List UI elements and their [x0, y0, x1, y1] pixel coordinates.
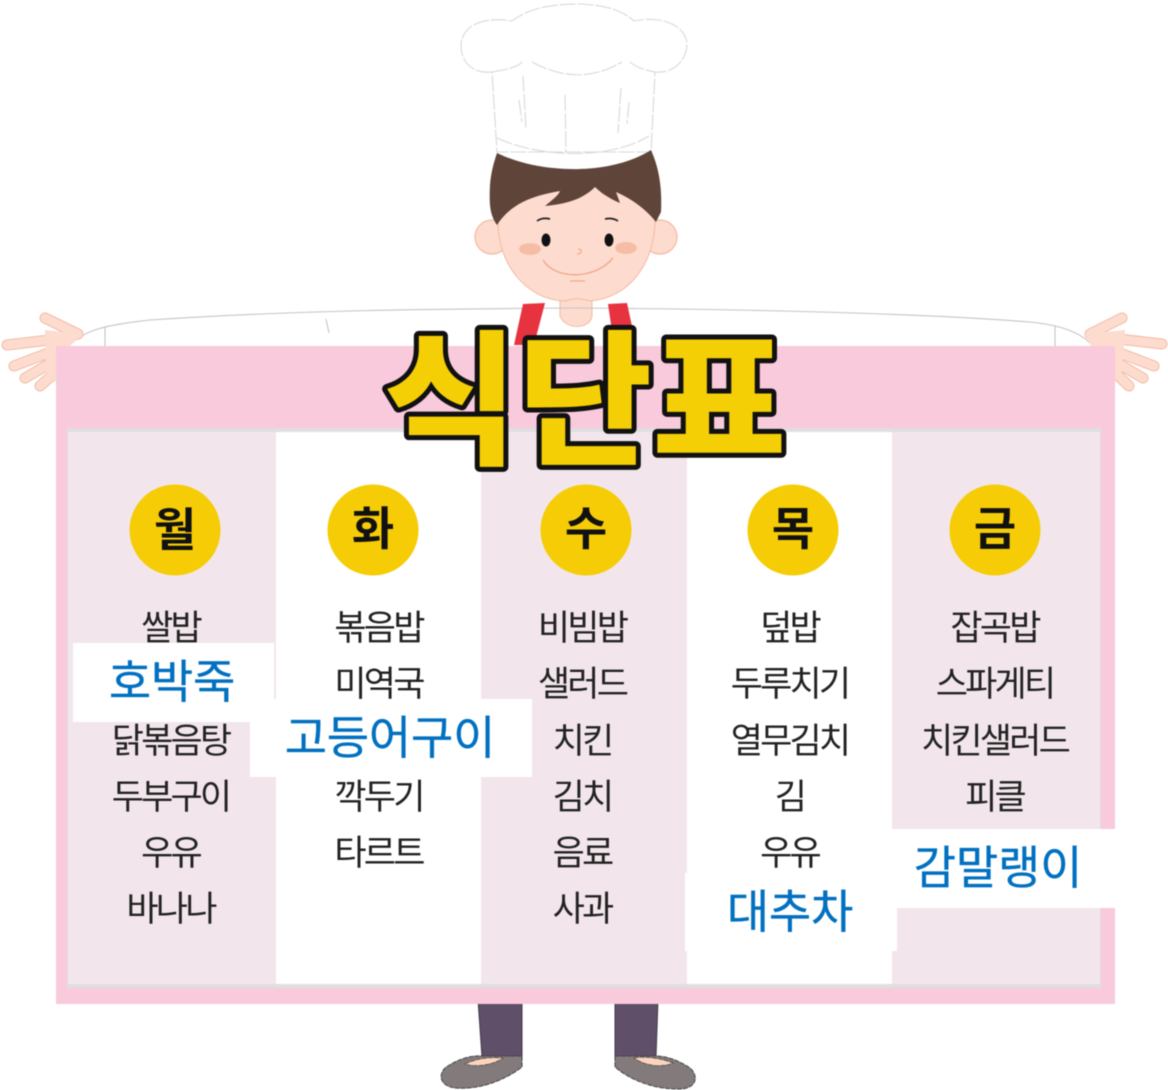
menu list: Thursday: 김	[775, 778, 804, 817]
menu list: Wednesday: 사과	[553, 890, 614, 929]
badge: Wednesday	[540, 484, 632, 576]
badge: Friday: 금	[974, 503, 1016, 555]
icon: shoes	[441, 1056, 695, 1089]
menu list: Tuesday: 깍두기	[334, 778, 423, 817]
callout: dried persimmon	[892, 829, 1115, 908]
menu list: Tuesday: 볶음밥	[334, 609, 424, 648]
badge: Monday	[130, 484, 220, 576]
badge: Thursday: 목	[772, 503, 814, 555]
menu list: Friday: 잡곡밥	[950, 609, 1040, 648]
menu list: Monday: 쌀밥	[141, 609, 201, 648]
menu list: Wednesday: 김치	[553, 778, 611, 817]
menu list: Monday: 두부구이	[112, 778, 229, 817]
icon: ears	[475, 220, 677, 254]
icon: face	[498, 185, 655, 301]
menu list: Friday	[921, 609, 1070, 817]
icon: apron straps	[514, 303, 636, 345]
icon: facial features	[519, 218, 637, 281]
badge: Tuesday	[328, 484, 418, 576]
icon: sleeves	[70, 308, 1092, 346]
icon: left hand	[7, 318, 82, 386]
menu list: Wednesday: 음료	[553, 834, 613, 873]
icon: chef hat	[461, 4, 687, 154]
column: Friday background	[892, 432, 1100, 984]
menu list: Tuesday	[334, 609, 424, 873]
column: Monday background	[68, 432, 276, 984]
icon: right hand	[1085, 318, 1162, 386]
column: Tuesday background	[276, 432, 481, 984]
callout: pumpkin porridge	[73, 643, 274, 722]
menu list: Wednesday: 비빔밥	[538, 609, 628, 648]
menu list: Thursday: 열무김치	[731, 722, 848, 761]
icon: hair	[490, 150, 661, 225]
badge: Thursday	[748, 484, 838, 576]
menu list: Wednesday: 치킨	[553, 722, 611, 761]
badge: Friday	[950, 484, 1040, 576]
menu list: Wednesday	[538, 609, 628, 929]
menu list: Monday: 닭볶음탕	[112, 722, 231, 761]
table frame	[67, 428, 1101, 988]
menu list: Monday: 바나나	[126, 890, 217, 929]
menu list: Friday: 피클	[965, 778, 1025, 817]
menu list: Thursday: 우유	[760, 834, 820, 873]
menu list: Monday	[112, 609, 231, 929]
menu list: Monday: 우유	[141, 834, 201, 873]
badge: Wednesday: 수	[565, 503, 607, 555]
menu list: Tuesday: 미역국	[334, 665, 424, 704]
icon: legs	[478, 1000, 658, 1057]
callout: grilled mackerel: 고등어구이	[285, 712, 495, 764]
title: 식단표	[384, 321, 786, 484]
column: Wednesday background	[481, 432, 687, 984]
panel: menu board	[56, 346, 1115, 1004]
menu list: Thursday: 두루치기	[731, 665, 848, 704]
column: Thursday background	[687, 432, 892, 984]
callout: jujube tea: 대추차	[727, 886, 853, 938]
menu list: Friday: 치킨샐러드	[921, 722, 1070, 761]
menu list: Friday: 스파게티	[936, 665, 1053, 704]
menu list: Wednesday: 샐러드	[538, 665, 628, 704]
icon: neck	[560, 292, 592, 326]
menu list: Thursday: 덮밥	[760, 609, 820, 648]
callout: pumpkin porridge: 호박죽	[109, 656, 235, 708]
menu list: Tuesday: 타르트	[334, 834, 424, 873]
board background	[56, 346, 1115, 1004]
badge: Monday: 월	[154, 504, 196, 556]
callout: jujube tea	[685, 873, 897, 951]
menu list: Thursday	[731, 609, 848, 873]
callout: dried persimmon: 감말랭이	[914, 842, 1082, 894]
badge: Tuesday: 화	[352, 503, 394, 555]
callout: grilled mackerel	[250, 699, 532, 777]
